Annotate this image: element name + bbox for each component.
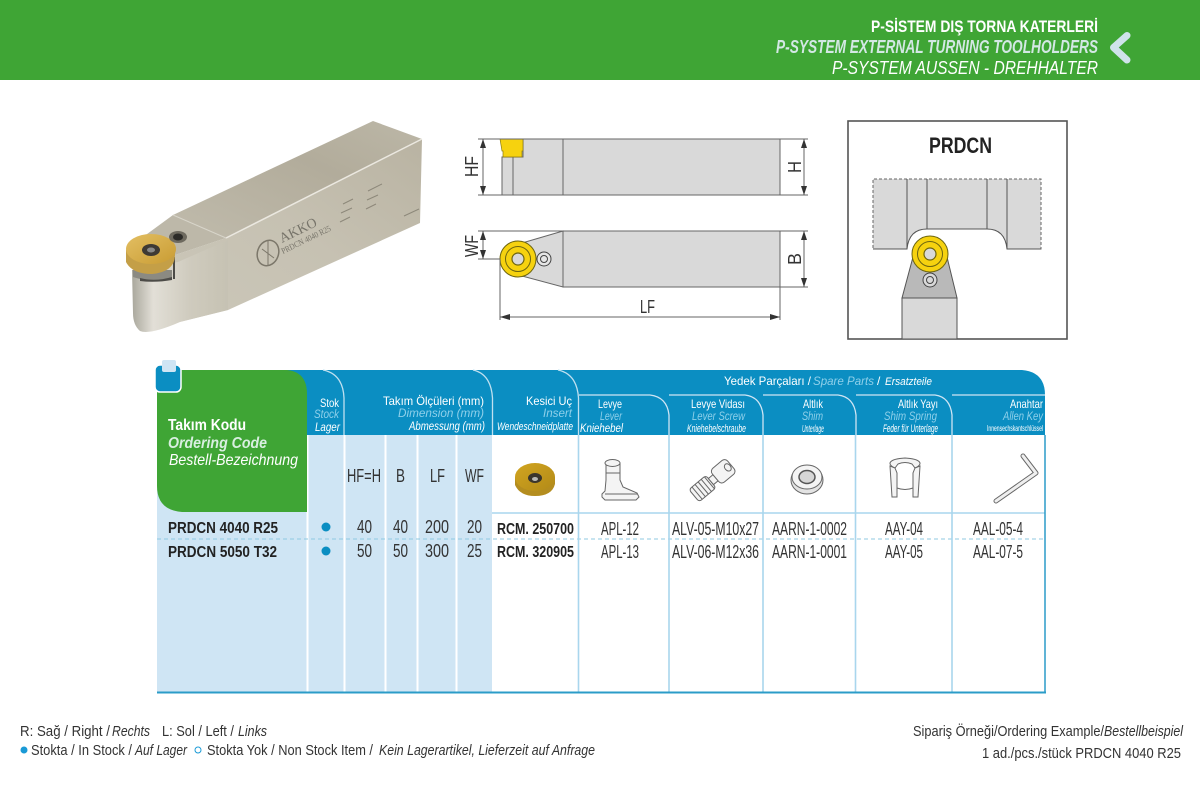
row: PRDCN 5050 T32: PRDCN 5050 T32 [168,544,277,561]
header: spare parts: Ersatzteile [885,376,932,388]
row: PRDCN 5050 T32 [168,541,1023,562]
shim [133,270,172,281]
row: PRDCN 4040 R25: PRDCN 4040 R25 [168,520,278,537]
row: PRDCN 4040 R25: 20 [467,517,482,537]
header: shim: Shim [802,409,823,423]
header: insert [497,394,573,433]
label WF: WF [462,235,482,257]
header: dimensions: Abmessung (mm) [408,419,485,433]
dimension column labels: HF=H [347,466,381,486]
footer legend [20,723,595,759]
header: insert: Insert [543,406,573,420]
panel: PRDCN application diagram [848,121,1067,339]
icon: back chevron [1114,36,1127,60]
row: PRDCN 5050 T32: RCM. 320905 [497,544,574,561]
dimension column labels: B [396,466,405,486]
icon: allen key [996,456,1036,501]
header: spare parts: Yedek Parçaları / [724,374,812,388]
screw [537,252,551,266]
row: PRDCN 5050 T32: 25 [467,541,482,561]
technical drawing: side view [462,139,808,195]
header: lever screw: Kniehebelschraube [687,423,746,435]
insert [912,236,948,272]
header: shim spring: Shim Spring [884,409,937,423]
header: allen key: Allen Key [1002,409,1044,423]
row: PRDCN 4040 R25 [168,517,1023,539]
footer legend: Rechts [112,723,150,740]
header: lever screw: Levye Vidası [691,397,745,411]
header: spare parts: Spare Parts [813,374,874,388]
diagram title: PRDCN [929,133,992,158]
footer legend: Stokta Yok / Non Stock Item / [207,742,374,759]
insert [500,241,536,277]
header: shim spring: Altlık Yayı [898,397,938,411]
row: PRDCN 4040 R25: ALV-05-M10x27 [672,519,759,539]
header: allen key: Innensechskantschlüssel [987,424,1043,433]
engraved logo: PRDCN 4040 R25 [279,223,332,256]
insert [126,234,176,274]
footer legend: R: Sağ / Right / [20,723,111,740]
header: spare parts [724,374,932,388]
tool head [902,257,957,298]
header: shim: Unterlage [802,424,824,435]
header: allen key [987,397,1044,433]
row: PRDCN 4040 R25: RCM. 250700 [497,521,574,538]
footer legend: L: Sol / Left / [162,723,235,740]
row: PRDCN 4040 R25: AARN-1-0002 [772,519,847,539]
row: PRDCN 5050 T32: APL-13 [601,542,639,562]
header: shim: Altlık [803,397,824,411]
header title lines: P-SYSTEM AUSSEN - DREHHALTER [832,58,1098,78]
header: insert: Kesici Uç [526,394,572,408]
row: PRDCN 4040 R25: AAL-05-4 [973,519,1023,539]
tool shank [902,298,957,339]
dimension column labels: WF [465,466,484,486]
engraved logo: AKKO [277,216,320,247]
row: PRDCN 4040 R25: AAY-04 [885,519,923,539]
screw [923,273,937,287]
footer legend: Auf Lager [134,742,188,759]
header: stock: Lager [315,420,341,434]
header: shim [802,397,824,435]
icon: shim [791,465,823,494]
footer legend: Links [238,723,267,740]
dimension column labels: LF [430,466,445,486]
footer legend: Kein Lagerartikel, Lieferzeit auf Anfrage [379,742,595,759]
header: lever: Lever [600,409,623,423]
dimension column labels [347,466,484,486]
green ordering code panel: Ordering Code [168,435,267,452]
icon: lever [602,460,639,500]
header band: blue [157,370,1045,435]
row: PRDCN 5050 T32: AAL-07-5 [973,542,1023,562]
header band [0,0,1200,80]
header title lines [776,17,1098,78]
header: stock: Stock [314,407,340,421]
technical drawing: top view [462,231,808,320]
row: PRDCN 5050 T32: 50 [393,541,408,561]
label HF: HF [462,156,482,177]
header: insert: Wendeschneidplatte [497,421,573,433]
row: PRDCN 4040 R25: 40 [357,517,372,537]
header: dimensions [383,394,485,433]
icon: corner tab [155,360,181,392]
screw [169,231,187,243]
row: PRDCN 5050 T32: ALV-06-M12x36 [672,542,759,562]
header: lever [580,397,623,435]
label H: H [785,161,805,173]
green ordering code panel: Bestell-Bezeichnung [169,452,298,469]
green ordering code panel [157,370,307,512]
row: PRDCN 4040 R25: 40 [393,517,408,537]
header: lever: Levye [598,397,622,411]
row: PRDCN 4040 R25: APL-12 [601,519,639,539]
row: PRDCN 5050 T32: AAY-05 [885,542,923,562]
header: lever: Kniehebel [580,421,623,435]
header title lines: P-SYSTEM EXTERNAL TURNING TOOLHOLDERS [776,37,1098,57]
icon: shim spring [890,458,920,497]
insert [500,139,523,157]
row: PRDCN 4040 R25: 200 [425,517,449,537]
icon: insert photo [515,463,555,496]
engraved logo [254,184,419,269]
footer legend: Stokta / In Stock / [31,742,133,759]
header: stock [314,396,341,434]
header title lines: P-SİSTEM DIŞ TORNA KATERLERİ [871,17,1098,36]
header: lever screw [687,397,746,435]
header: shim spring [883,397,938,435]
header: spare parts: / [877,374,881,388]
icon: lever screw [688,458,737,503]
header: allen key: Anahtar [1010,397,1043,411]
table column backgrounds [157,435,492,693]
product photo: toolholder [126,121,422,332]
footer ordering example: Sipariş Örneği/Ordering Example/ [913,722,1105,740]
label B: B [785,253,805,265]
workpiece [873,179,1041,249]
header: dimensions: Takım Ölçüleri (mm) [383,394,484,408]
green ordering code panel: Takım Kodu [168,417,246,434]
footer ordering example [913,722,1184,762]
header: shim spring: Feder für Unterlage [883,423,938,435]
data table [155,360,1046,693]
footer ordering example: Bestellbeispiel [1104,723,1184,740]
row: PRDCN 5050 T32: AARN-1-0001 [772,542,847,562]
header: dimensions: Dimension (mm) [398,406,484,420]
row: PRDCN 5050 T32: 50 [357,541,372,561]
table grid lines [157,435,1046,693]
header: lever screw: Lever Screw [692,409,746,423]
label LF: LF [640,297,655,317]
row: PRDCN 5050 T32: 300 [425,541,449,561]
header: stock: Stok [320,396,340,410]
